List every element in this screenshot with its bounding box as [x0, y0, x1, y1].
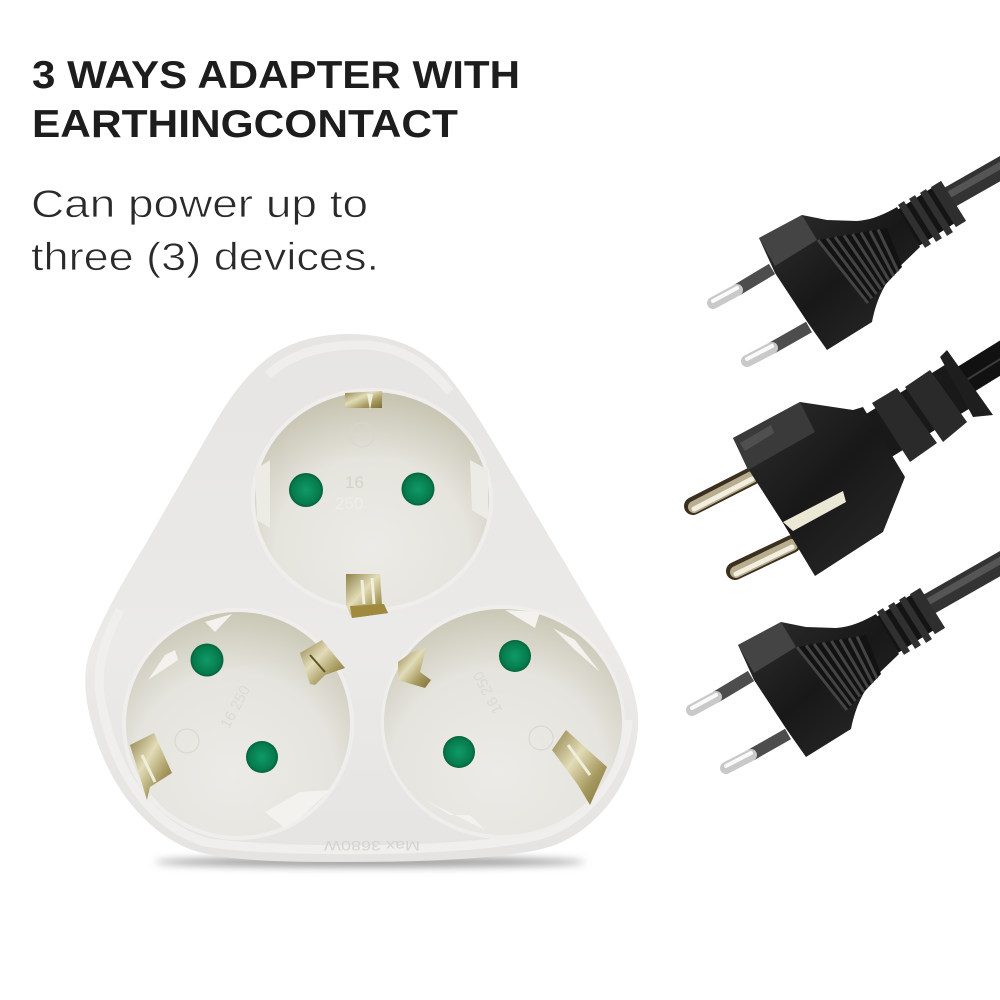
strain relief	[880, 591, 940, 653]
plug cap	[733, 402, 815, 470]
brass pins	[693, 476, 792, 574]
socket: top: 16	[345, 473, 364, 492]
ribs	[818, 228, 902, 303]
earth hole right	[402, 472, 434, 506]
hole upper	[499, 640, 531, 672]
socket: bottom left	[122, 608, 354, 840]
plug cap	[738, 622, 796, 673]
plug body	[733, 402, 905, 576]
socket: bottom right	[381, 605, 625, 839]
socket: top	[251, 388, 493, 618]
pins	[692, 676, 788, 768]
strain relief	[870, 350, 993, 462]
hole lower	[443, 736, 475, 768]
plug: bottom two-pin	[692, 555, 1000, 768]
socket: bottom right: 16 250	[470, 668, 506, 717]
plug body	[759, 207, 920, 350]
plug: top two-pin	[713, 160, 1000, 361]
contact right	[300, 640, 345, 685]
description text: three (3) devices.	[31, 236, 379, 279]
cord	[924, 555, 1000, 607]
strain relief	[901, 184, 961, 246]
pins	[713, 269, 809, 361]
cord	[945, 160, 1000, 200]
description text	[31, 183, 379, 279]
top contact	[345, 391, 382, 410]
title: EARTHINGCONTACT	[32, 103, 458, 146]
title	[32, 54, 520, 146]
bottom contact	[346, 574, 388, 618]
earthing contact	[783, 491, 846, 531]
plug body	[738, 614, 899, 757]
plug cap	[759, 215, 817, 266]
hole upper	[190, 644, 224, 676]
cap slot	[740, 425, 774, 451]
cord	[955, 352, 1000, 386]
model marking: Max 3680W	[323, 838, 420, 854]
ribs	[797, 635, 881, 710]
contact left	[398, 648, 431, 688]
title: 3 WAYS ADAPTER WITH	[32, 54, 520, 97]
socket: top: 250	[335, 494, 363, 513]
plug: middle earthed	[693, 350, 1000, 576]
contact left	[130, 733, 172, 800]
contact right	[552, 730, 607, 805]
3-way adapter	[85, 334, 638, 867]
earth hole left	[289, 473, 323, 507]
socket: bottom left: 16 250	[217, 683, 254, 731]
hole lower	[246, 741, 278, 773]
description text: Can power up to	[31, 183, 368, 226]
